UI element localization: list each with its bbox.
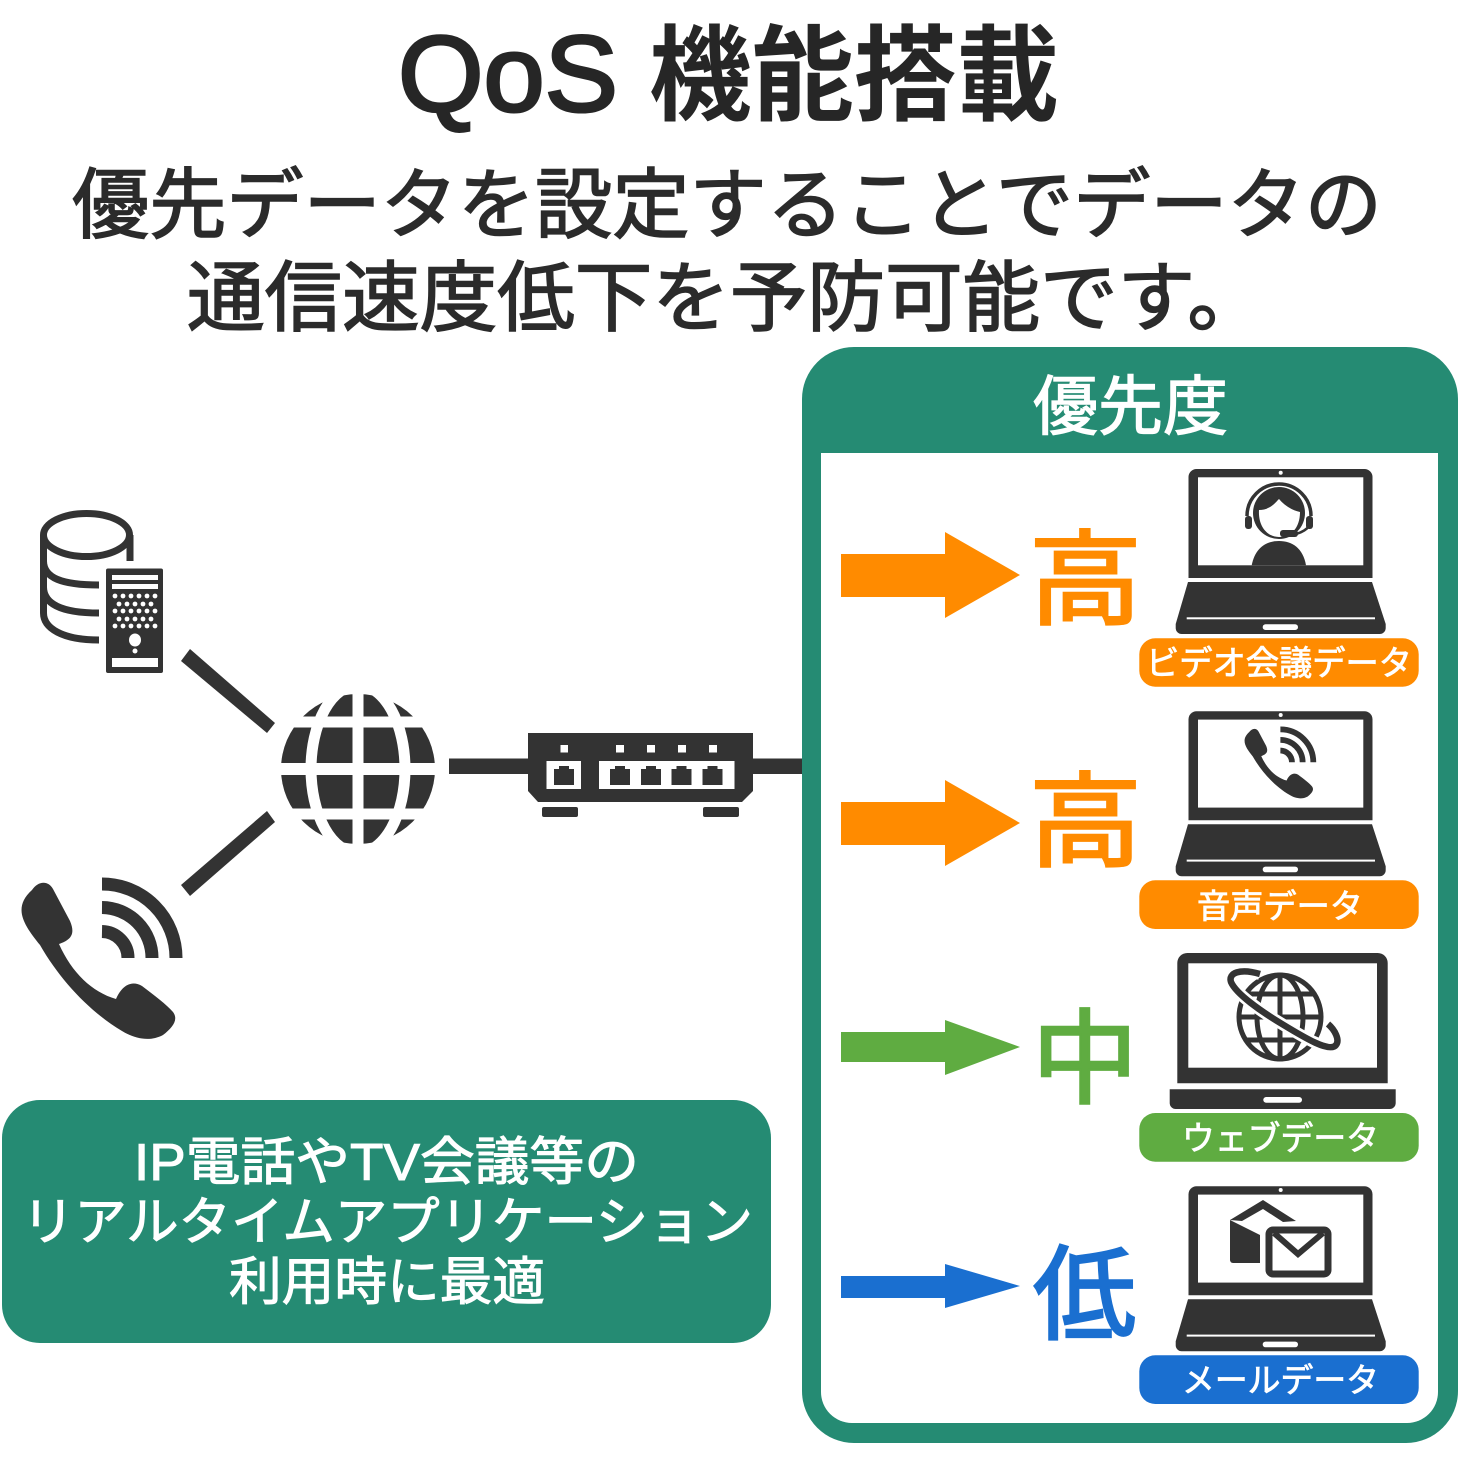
icon: globe: [275, 685, 441, 853]
icon: globe with orbit: [1231, 971, 1337, 1059]
label: medium: 中: [1032, 976, 1138, 1125]
laptop: video conference: [1176, 469, 1386, 634]
arrow: medium priority: [841, 1020, 1020, 1075]
subtitle: 通信速度低下を予防可能です。: [187, 237, 1265, 348]
laptop: mail: [1176, 1186, 1386, 1351]
icon: network switch: [528, 733, 753, 817]
tag: voice data: 音声データ: [1197, 879, 1363, 928]
title: [398, 0, 1059, 142]
icon: phone: [1245, 729, 1313, 798]
callout: realtime applications: 利用時に最適: [229, 1240, 545, 1315]
laptop: web: [1170, 953, 1396, 1109]
tag: voice data: [1139, 879, 1419, 929]
label: high: 高: [1029, 739, 1142, 888]
panel: priority: [802, 347, 1458, 1443]
laptop: voice: [1176, 711, 1386, 876]
icon: house and envelope: [1230, 1200, 1328, 1274]
tag: mail data: メールデータ: [1182, 1353, 1379, 1402]
subtitle: [72, 144, 1382, 348]
cable: switch to priority panel: [752, 758, 804, 774]
callout: realtime applications: IP電話やTV会議等の: [134, 1134, 639, 1192]
callout: realtime applications: リアルタイムアプリケーション: [22, 1180, 753, 1255]
subtitle: 優先データを設定することでデータの: [72, 144, 1382, 255]
icon: server tower: [106, 568, 163, 673]
label: high: 高: [1029, 497, 1142, 646]
tag: video conference data: ビデオ会議データ: [1146, 636, 1412, 685]
icon: phone with signal waves: [22, 883, 176, 1039]
tag: web data: ウェブデータ: [1182, 1111, 1379, 1160]
connector: phone to globe: [181, 811, 275, 896]
cable: globe to switch: [449, 758, 529, 774]
callout: realtime applications: [2, 1100, 771, 1343]
label: low: 低: [1033, 1212, 1136, 1361]
icon: database and server: [44, 514, 163, 673]
arrow: low priority: [841, 1264, 1020, 1308]
arrow: high priority video: [841, 532, 1020, 618]
connector: server to globe: [181, 649, 275, 733]
tag: mail data: [1139, 1353, 1419, 1404]
icon: database cylinder: [44, 514, 130, 640]
icon: headset person: [1245, 484, 1313, 565]
title: QoS: [398, 13, 618, 134]
tag: web data: [1139, 1111, 1419, 1162]
arrow: high priority voice: [841, 780, 1020, 866]
panel heading: 優先度: [1033, 354, 1228, 448]
